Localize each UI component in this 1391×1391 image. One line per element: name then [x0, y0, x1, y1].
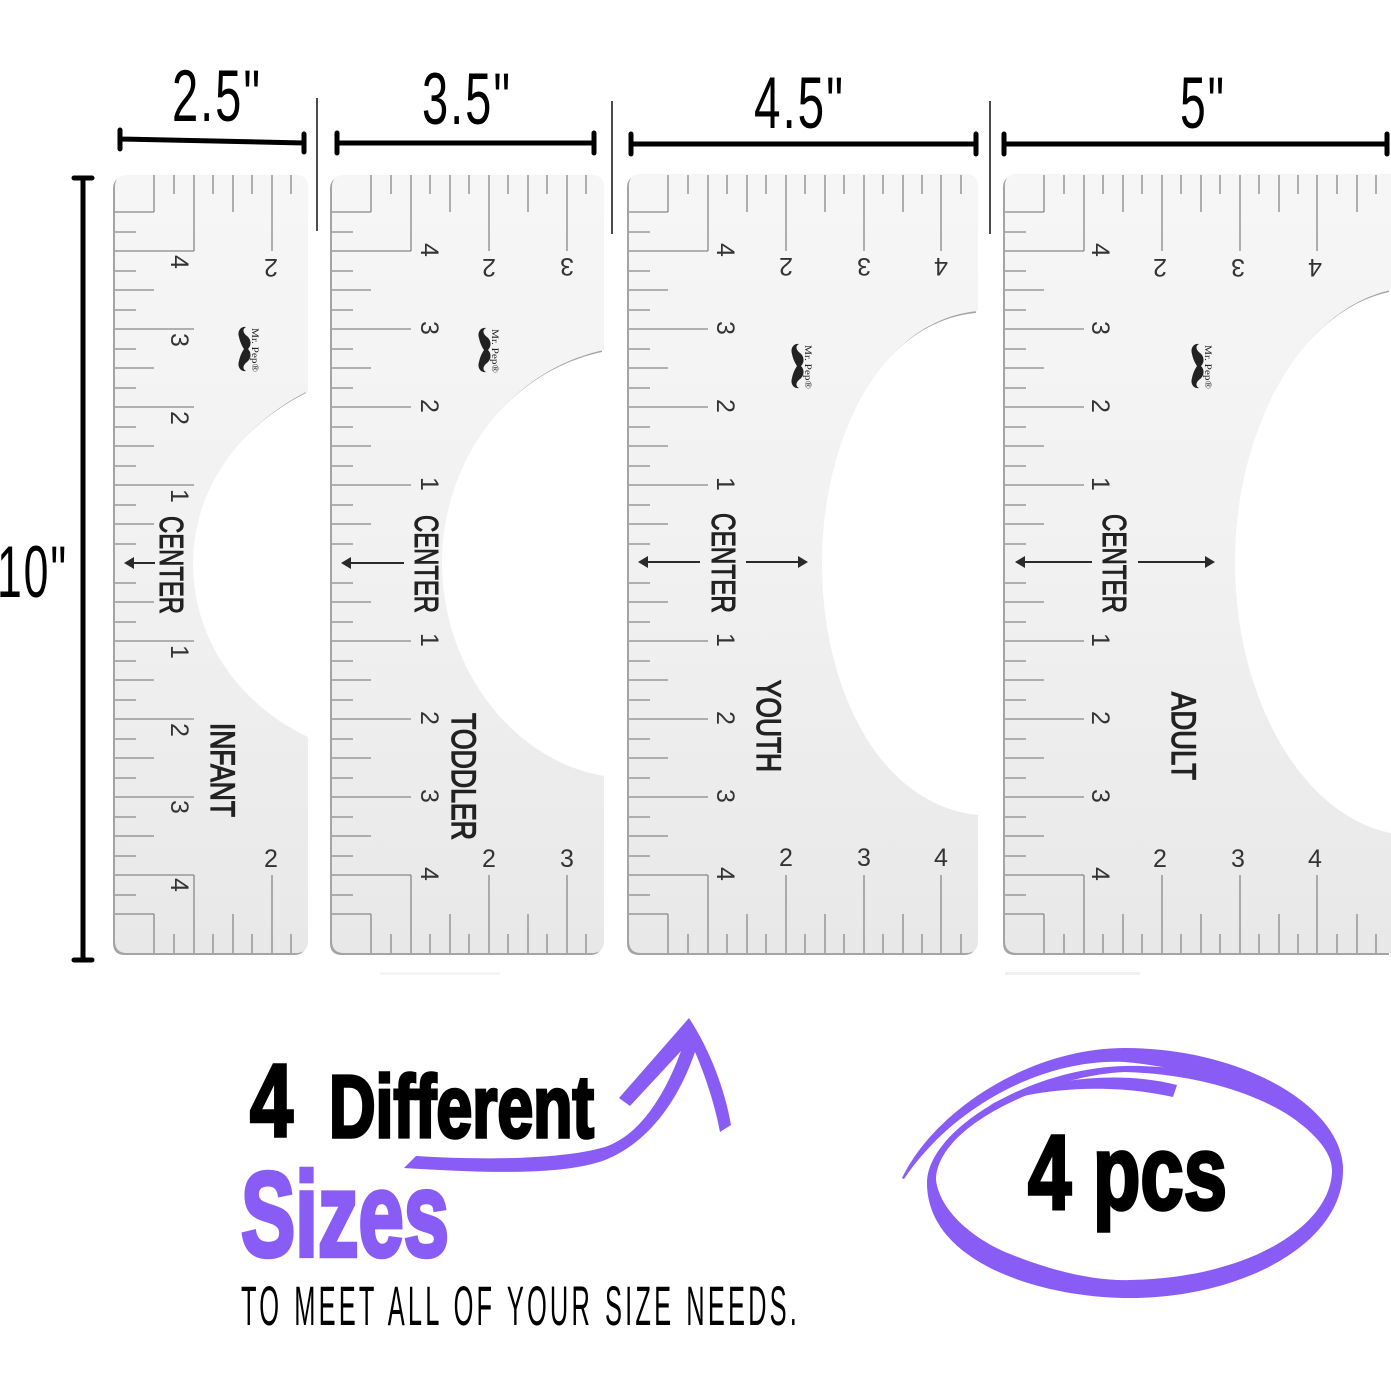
panel: youth ruler: 4 [934, 844, 948, 872]
panel: infant ruler: 4 [165, 255, 193, 269]
width dimension: 3.5 inch: 3.5" [422, 59, 512, 140]
panel: toddler ruler: 2 [415, 711, 443, 725]
panel: adult ruler: 2 [1086, 399, 1114, 413]
faint strip under toddler ruler [380, 972, 500, 975]
height dimension: 10 inch [0, 178, 92, 960]
panel: youth ruler: YOUTH [749, 680, 787, 772]
panel: youth ruler: CENTER [705, 513, 742, 613]
separators between sizes [317, 98, 990, 234]
panel: toddler ruler: CENTER [408, 515, 445, 613]
width dimension: 5 inch: 5" [1180, 63, 1226, 144]
panel: adult ruler: ADULT [1164, 692, 1202, 780]
panel: infant ruler: 2 [165, 411, 193, 425]
panel: infant ruler: 3 [165, 800, 193, 814]
panel: toddler ruler: 4 [415, 867, 443, 881]
panel: youth ruler: 4 [711, 243, 739, 257]
panel: adult ruler: 1 [1086, 477, 1114, 491]
panel: youth ruler: 3 [857, 252, 871, 280]
panel: adult ruler: 3 [1231, 253, 1245, 281]
panel: adult ruler: 3 [1086, 321, 1114, 335]
panel: adult ruler: 2 [1153, 253, 1167, 281]
width dimension: 4.5 inch: 4.5" [754, 63, 845, 144]
panel: adult ruler: CENTER [1096, 514, 1133, 613]
panel: adult ruler: 4 [1086, 243, 1114, 257]
panel: toddler ruler [330, 175, 604, 955]
panel: adult ruler: 4 [1308, 253, 1322, 281]
panel: youth ruler: Mr. Pep® [803, 345, 813, 389]
panel: youth ruler: 2 [711, 711, 739, 725]
panel: youth ruler: 1 [711, 633, 739, 647]
panel: toddler ruler: 3 [560, 845, 574, 873]
heading: 4 different: 4 [250, 1043, 293, 1158]
panel: toddler ruler: 2 [415, 399, 443, 413]
panel: toddler ruler: 2 [482, 253, 496, 281]
heading: 4 different [250, 1043, 594, 1158]
panel: infant ruler: 2 [264, 845, 278, 873]
panel: toddler ruler: Mr. Pep® [490, 329, 500, 373]
panel: infant ruler: 2 [165, 723, 193, 737]
panel: toddler ruler: 2 [482, 845, 496, 873]
panel: adult ruler: 4 [1308, 845, 1322, 873]
panel: infant ruler: INFANT [203, 723, 241, 817]
panel: adult ruler [1003, 174, 1391, 955]
heading: 4 different: Different [329, 1057, 594, 1156]
panel: infant ruler: Mr. Pep® [250, 328, 260, 372]
panel: toddler ruler: 1 [415, 633, 443, 647]
panel: infant ruler: 1 [165, 645, 193, 659]
panel: adult ruler: 2 [1086, 711, 1114, 725]
panel: toddler ruler: 3 [415, 789, 443, 803]
panel: youth ruler: 2 [779, 252, 793, 280]
panel: toddler ruler: 3 [560, 252, 574, 280]
panel: youth ruler: 3 [711, 321, 739, 335]
panel: youth ruler: 2 [779, 844, 793, 872]
panel: infant ruler: 2 [264, 253, 278, 281]
width dimension: 2.5 inch [120, 56, 304, 152]
callout: 4 pcs: 4 pcs [1028, 1114, 1227, 1232]
panel: youth ruler: 4 [711, 867, 739, 881]
panel: youth ruler: 2 [711, 399, 739, 413]
panel: infant ruler: CENTER [153, 516, 190, 614]
panel: youth ruler [627, 174, 1000, 955]
faint strip under adult ruler [1005, 972, 1140, 975]
panel: youth ruler: 4 [934, 252, 948, 280]
panel: adult ruler: Mr. Pep® [1203, 345, 1213, 389]
panel: adult ruler: 2 [1153, 845, 1167, 873]
panel: youth ruler: 3 [857, 844, 871, 872]
panel: infant ruler: 4 [165, 878, 193, 892]
width dimension: 5 inch [1004, 63, 1387, 154]
width dimension: 2.5 inch: 2.5" [172, 56, 262, 137]
panel: adult ruler: 3 [1231, 845, 1245, 873]
icon: purple swoosh arrow [404, 1018, 731, 1172]
heading: sizes: Sizes [241, 1148, 449, 1282]
panel: infant ruler: 3 [165, 333, 193, 347]
panel: toddler ruler: TODDLER [444, 713, 482, 840]
width dimension: 4.5 inch [631, 63, 976, 154]
panel: adult ruler: 3 [1086, 789, 1114, 803]
panel: infant ruler: 1 [165, 489, 193, 503]
panel: toddler ruler: 4 [415, 243, 443, 257]
panel: youth ruler: 3 [711, 789, 739, 803]
panel: toddler ruler: 1 [415, 477, 443, 491]
panel: infant ruler [113, 175, 308, 955]
width dimension: 3.5 inch [337, 59, 594, 153]
panel: adult ruler: 4 [1086, 867, 1114, 881]
height dimension: 10 inch: 10" [0, 532, 68, 613]
panel: youth ruler: 1 [711, 477, 739, 491]
panel: toddler ruler: 3 [415, 321, 443, 335]
icon: purple hand-drawn ellipse [902, 1048, 1343, 1298]
panel: adult ruler: 1 [1086, 633, 1114, 647]
